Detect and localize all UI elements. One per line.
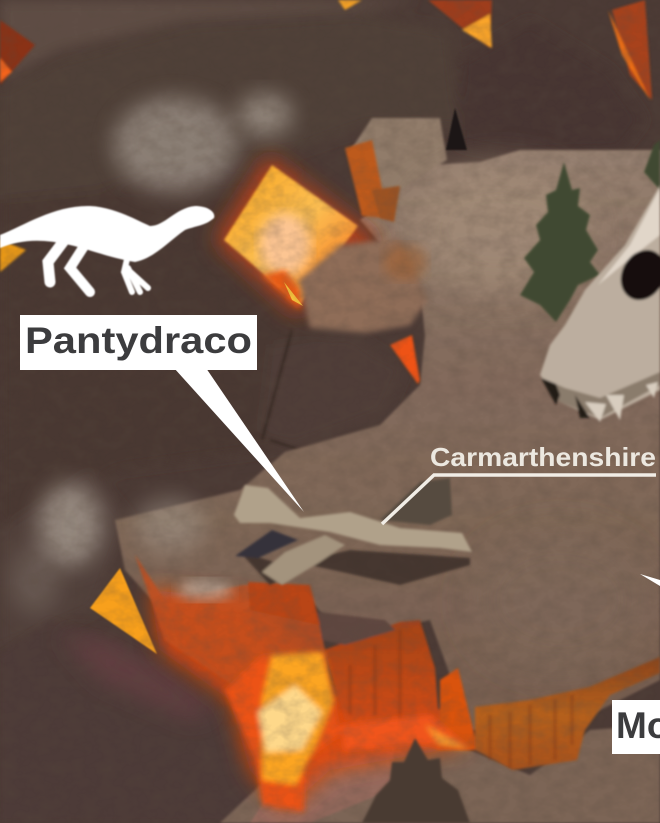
callout pointer (174, 368, 304, 512)
rock spike at top (446, 108, 467, 150)
tree: bottom (362, 738, 470, 823)
dark rock shapes (0, 0, 645, 650)
lava pool: lower bright (225, 652, 470, 812)
icon: dinosaur silhouette (0, 206, 214, 292)
boulder orange tint (383, 244, 427, 280)
boulder lava tint (60, 635, 215, 720)
foreground rock bottom right (220, 725, 660, 823)
lower lava fissure glow (150, 590, 470, 810)
lava pool: centre (215, 155, 380, 315)
upper bone (234, 485, 472, 552)
eye socket (612, 242, 660, 308)
bone shadow (240, 550, 470, 585)
label: Pantydraco (20, 315, 304, 512)
label text: Carmarthenshire (430, 442, 656, 472)
fossil bones (234, 478, 472, 585)
dinosaur skull (540, 185, 660, 422)
boulder: centre (299, 238, 428, 333)
ground highlight (410, 165, 650, 670)
lava wall: centre column (345, 140, 388, 218)
lit ground plateau (115, 118, 660, 730)
lower left dark boulder (0, 620, 258, 823)
label: partial M box (612, 700, 660, 754)
teeth (585, 382, 658, 422)
lava triangle: lower left (90, 568, 157, 654)
lava shards: top edge (0, 0, 652, 272)
label: Carmarthenshire (382, 442, 656, 524)
arrow tip: right edge (640, 574, 660, 586)
lava walls: fissure (135, 555, 660, 770)
lava shard: under boulder (390, 335, 420, 384)
tree: upper right (520, 140, 660, 322)
leader line (382, 475, 656, 524)
steam clouds (10, 93, 293, 615)
label box (20, 315, 257, 370)
wall streaks (350, 630, 572, 768)
label text: Pantydraco (25, 320, 252, 361)
lower bone (262, 535, 345, 585)
dark cracks (262, 330, 345, 450)
